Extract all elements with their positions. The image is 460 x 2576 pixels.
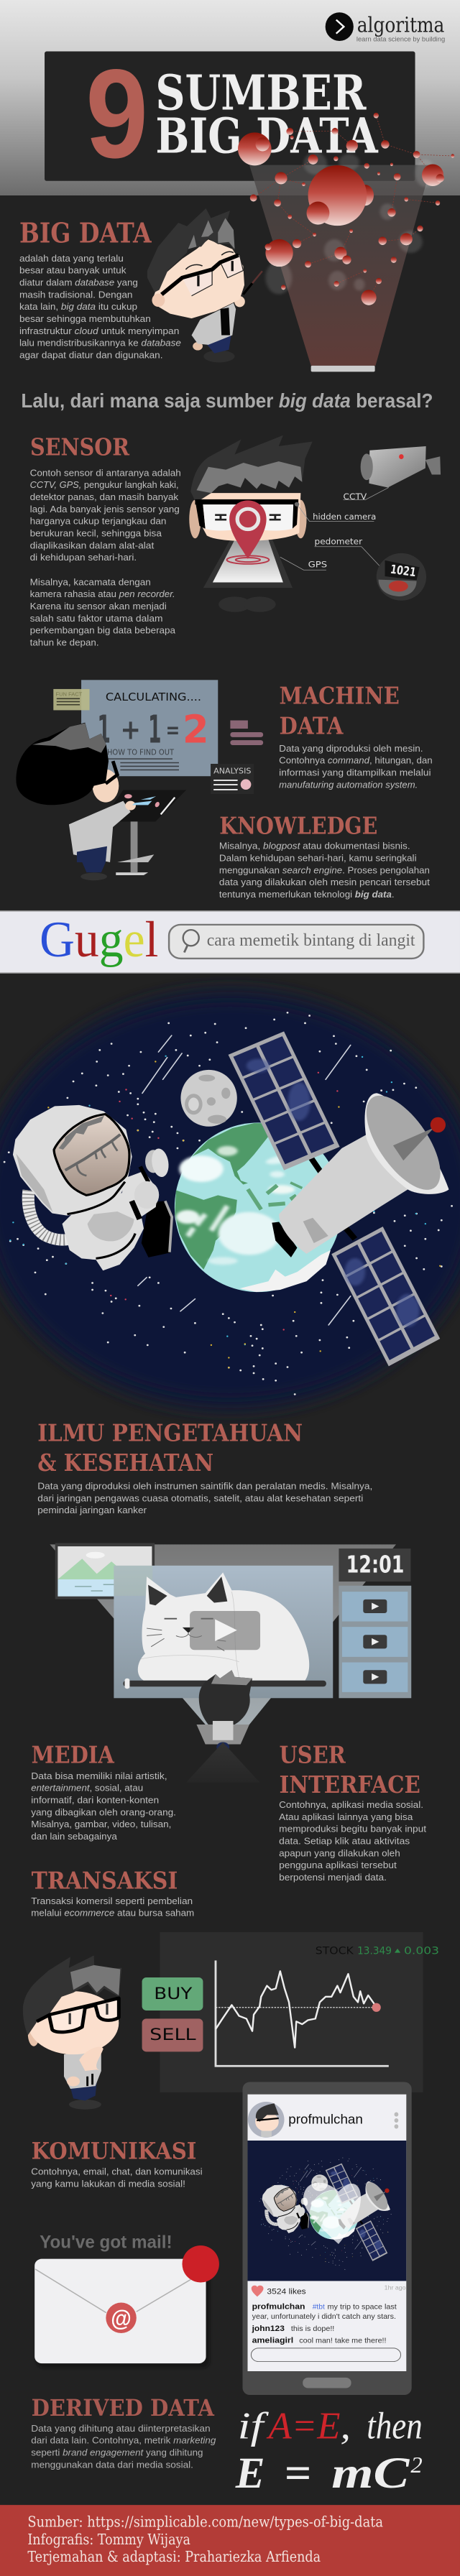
sensor description: perkembangan big data beberapa [30,625,176,636]
astronaut [14,1107,172,1270]
heading: transaksi: TRANSAKSI [32,1867,178,1895]
sensor description: diaplikasikan dalam alat-alat [30,540,155,550]
komunikasi description: yang kamu lakukan di media sosial! [31,2179,185,2189]
heading: user interface: USER [280,1742,346,1769]
sensor description: tahun ke depan. [30,637,99,647]
heading: komunikasi: KOMUNIKASI [32,2137,196,2164]
heading: user interface: INTERFACE [280,1771,420,1799]
analysis card [211,764,254,794]
user interface description: berpotensi menjadi data. [279,1872,387,1883]
big data description: lalu mendistribusikannya ke database [19,338,181,348]
sensor description: di kehidupan sehari-hari. [30,553,137,563]
user interface description: Atau aplikasi lainnya yang bisa [279,1811,413,1822]
sell button: SELL [150,2026,196,2044]
formula: A=E [266,2406,341,2447]
logo: algoritma: learn data science by building [356,36,445,42]
space background blob [0,986,460,1414]
satellite telescope and dish [272,1085,455,1257]
heading: ilmu pengetahuan dan kesehatan: ILMU PENGETAHUAN [37,1419,303,1447]
phone home button [303,2378,351,2388]
media description [31,1771,176,1842]
footer credits: Sumber: https://simplicable.com/new/types-of-big-data [27,2513,383,2531]
big data description: masih tradisional. Dengan [19,290,132,300]
post avatar [248,2102,285,2138]
big data description: diatur dalam database yang [19,277,138,287]
formula: 2 [410,2452,423,2478]
machine data description: manufaturing automation system. [279,780,418,790]
sensor description [30,468,181,647]
post likes row: 3524 likes [267,2287,306,2296]
clock panel: 12:01 [346,1551,404,1579]
machine data screen: = [166,719,180,743]
machine data description: Contohnya command, hitungan, dan [279,755,433,766]
sell button [142,2018,203,2051]
media description: Data bisa memiliki nilai artistik, [31,1771,167,1781]
transaksi description: melalui ecommerce atau bursa saham [31,1908,194,1919]
stock ticker: STOCK [316,1946,354,1957]
formula: , [340,2406,351,2447]
heading: sensor: SENSOR [30,434,130,461]
ilmu pengetahuan description [37,1481,372,1515]
user interface description [279,1799,426,1883]
clock panel [339,1548,410,1582]
sensor description: kamera rahasia atau pen recorder. [30,589,175,599]
phone post image [259,2158,392,2269]
derived data description: menggunakan data dari media sosial. [31,2460,193,2470]
post comments: #tbt [313,2303,325,2311]
title: sumber big data: BIG DATA [155,108,378,165]
machine data screen: HOW TO FIND OUT [107,748,174,757]
media description: dan lain sebagainya [31,1831,117,1842]
post username: profmulchan [288,2113,363,2127]
derived data description: Data yang dihitung atau diinterpretasikan [31,2423,211,2434]
sensor description: detektor panas, dan masih banyak [30,491,178,502]
video player [114,1566,333,1698]
icon: pedometer: 1021 [390,563,417,580]
post comments: ameliagirl [252,2336,293,2345]
post likes row [252,2284,406,2296]
solar panels [229,1031,440,1366]
image card [55,1543,155,1599]
character from behind watching [196,1670,252,1752]
user interface description: memproduksi begitu banyak input [279,1824,426,1834]
comment input box [251,2348,401,2362]
footer credits [0,2505,460,2576]
heading: ilmu pengetahuan dan kesehatan [37,1419,303,1477]
sensor description: salah satu faktor utama dalam [30,613,163,624]
sensor labels and leader lines: CCTV [344,491,367,502]
stock chart panel [160,1932,439,2092]
buy button: BUY [154,1985,193,2003]
search box: cara memetik bintang di langit [207,931,415,950]
komunikasi description: Contohnya, email, chat, dan komunikasi [31,2166,203,2176]
formula [235,2406,423,2497]
character: presenter with wand [147,208,262,362]
heading: user interface [280,1742,420,1799]
knowledge description: Misalnya, blogpost atau dokumentasi bisnis. [219,841,410,851]
play button overlay [190,1611,260,1650]
knowledge description: tentunya memerlukan teknologi big data. [219,889,395,900]
sensor labels and leader lines [280,487,389,570]
phone screen [247,2095,406,2371]
media description: Misalnya, gambar, video, tulisan, [31,1819,171,1829]
sensor description: harganya cukup terjangkau dan [30,516,166,527]
big data description: besar atau banyak untuk [19,265,126,276]
transaksi description [31,1896,194,1919]
post menu dots [395,2113,398,2128]
sensor description: Misalnya, kacamata dengan [30,577,151,587]
big data description: adalah data yang terlalu [19,253,124,264]
sensor description: lagi. Ada banyak jenis sensor yang [30,504,180,514]
big data description: kata lain, big data itu cukup [19,302,137,312]
search box [169,925,423,959]
fun fact card: FUN FACT [56,692,83,697]
icon: cctv camera [361,446,441,487]
footer credits: Infografis: Tommy Wijaya [27,2531,190,2548]
post comments: my trip to space last [328,2303,397,2311]
derived data description [31,2423,216,2470]
title panel [45,42,415,185]
cat [138,1572,309,1681]
knowledge description [219,841,430,900]
knowledge description: menggunakan search engine. Proses pengolahan [219,865,430,875]
heading: derived data: DERIVED DATA [32,2393,215,2422]
heading: machine data: MACHINE [280,683,400,710]
post comments: john123 [252,2324,285,2333]
heading: knowledge: KNOWLEDGE [219,813,377,840]
sensor labels and leader lines: hidden camera [313,512,376,522]
stock ticker [316,1946,439,1957]
formula: mC [331,2449,410,2497]
post comments [252,2302,397,2345]
derived data description: dari data lain. Contohnya, metrik marketing [31,2435,216,2446]
footer credits: Terjemahan & adaptasi: Prahariezka Arfienda [27,2548,321,2565]
search bar band [0,910,460,974]
phone mockup [243,2082,412,2395]
stars [4,1012,452,1394]
machine data screen: + [120,714,141,746]
machine data description: informasi yang ditampilkan melalui [279,767,431,777]
knowledge description: Dalam kehidupan sehari-hari, kamu seringkali [219,853,417,863]
analysis card: ANALYSIS [213,767,252,775]
formula: E [235,2449,265,2497]
icon: envelope: @ [111,2305,132,2331]
big data description: agar dapat diatur dan digunakan. [19,350,163,360]
stock ticker: 0.003 [404,1946,439,1957]
big data description: besar sehingga membutuhkan [19,313,151,324]
media description: yang dibagikan oleh orang-orang. [31,1807,176,1817]
machine data screen [81,680,218,776]
sensor description: berukuran kecil, sehingga bisa [30,528,162,538]
title number 9: 9 [86,42,148,185]
video sidebar [339,1586,411,1698]
character: thinking trader [23,1955,121,2110]
character: operator at console [16,723,186,863]
mail heading: You've got mail! [40,2233,172,2252]
stock ticker: 13.349 [357,1946,392,1957]
formula: then [367,2406,423,2447]
title: sumber big data: SUMBER [155,65,367,121]
derived data description: seperti brand engagement yang dihitung [31,2447,203,2457]
knowledge description: data yang dilakukan oleh mesin pencari tersebut [219,877,430,887]
big data description: infrastruktur cloud untuk menyimpan [19,326,179,336]
machine data screen: 1 [98,708,111,752]
user interface description: pengguna aplikasi tersebut [279,1860,397,1870]
logo: algoritma [326,12,445,42]
user interface description: apapun yang dilakukan oleh [279,1848,400,1858]
media description: informatif, dari konten-konten [31,1795,159,1805]
komunikasi description [31,2166,203,2189]
sensor description: Contoh sensor di antaranya adalah [30,468,181,478]
user interface description: data. Setiap klik atau aktivitas [279,1836,410,1846]
formula: if [238,2406,269,2447]
fun fact card [53,689,89,710]
machine data screen: CALCULATING.... [106,690,201,703]
gugel logo: Gugel [40,910,158,967]
projection light cone [50,1544,396,1725]
heading: machine data: DATA [280,713,344,740]
heading: machine data [280,683,400,740]
sensor description: Karena itu sensor akan menjadi [30,601,167,611]
ilmu pengetahuan description: dari jaringan pengawas cuasa otomatis, satelit, atau alat kesehatan seperti [37,1493,363,1503]
sensor description: CCTV, GPS, pengukur langkah kaki, [30,480,179,490]
question heading: Lalu, dari mana saja sumber big data berasal? [21,390,433,412]
sensor labels and leader lines: GPS [308,560,327,569]
post likes row: 1hr ago [385,2284,406,2291]
title: sumber big data [155,65,378,165]
icon: pedometer [377,553,426,601]
space illustration: astronaut, moon, earth, satellite [4,1012,455,1394]
icon: envelope [34,2245,219,2368]
character shadow [186,1742,259,1782]
icon: text bars [230,721,263,745]
heading: ilmu pengetahuan dan kesehatan: & KESEHATAN [37,1449,213,1477]
machine data description: Data yang diproduksi oleh mesin. [279,743,423,754]
heading: big data: BIG DATA [19,218,152,249]
post comments: this is dope!! [291,2325,334,2333]
operator feet [80,862,148,880]
post comments: cool man! take me there!! [299,2337,387,2345]
media description: entertainment, sosial, atau [31,1783,143,1793]
machine data screen: 1 [148,708,161,752]
big data description [19,253,181,360]
header gradient band [0,0,460,195]
projector light beam [249,165,431,371]
user interface description: Contohnya, aplikasi media sosial. [279,1799,423,1810]
transaksi description: Transaksi komersil seperti pembelian [31,1896,193,1906]
machine data screen: 2 [183,708,209,752]
moon [180,1070,237,1127]
earth [175,1122,342,1292]
formula: = [285,2449,311,2497]
machine data description [279,743,433,790]
data spheres network [238,113,454,305]
ilmu pengetahuan description: Data yang diproduksi oleh instrumen saintifik dan peralatan medis. Misalnya, [37,1481,372,1491]
video progress bar [123,1679,326,1689]
character: glasses with location pin [189,435,313,612]
line chart [216,1960,389,2066]
post comments: year, unfortunately i didn't catch any stars. [252,2312,396,2321]
ilmu pengetahuan description: pemindai jaringan kanker [37,1505,147,1515]
post comments: profmulchan [252,2302,305,2311]
buy button [142,1977,203,2011]
sensor labels and leader lines: pedometer [315,537,362,546]
heading: media: MEDIA [32,1742,114,1769]
